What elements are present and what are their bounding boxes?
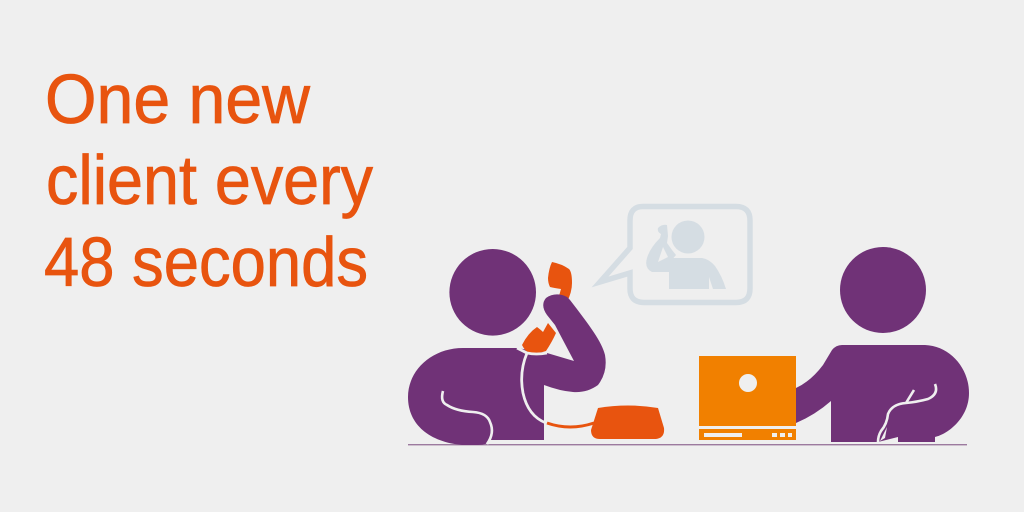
- phone cord on body: [517, 348, 547, 423]
- handset earpiece: [548, 262, 572, 302]
- title: One new: [45, 60, 310, 138]
- person: right typist: [796, 247, 969, 442]
- baseline: [408, 444, 967, 445]
- title: [44, 60, 373, 301]
- head: [449, 249, 536, 336]
- hand outline: [878, 384, 936, 442]
- bubble icon: caller: [646, 220, 726, 289]
- arm outline: [442, 391, 492, 444]
- play dot: [739, 374, 757, 392]
- laptop screen: [699, 356, 796, 426]
- body and arm: [796, 345, 969, 442]
- handset mouthpiece: [522, 323, 556, 353]
- laptop: [699, 356, 796, 440]
- body and arm: [408, 294, 606, 445]
- telephone base: [591, 406, 664, 439]
- title: 48 seconds: [44, 223, 368, 301]
- title: client every: [46, 141, 373, 219]
- pen tip: [880, 427, 887, 441]
- base details: [704, 433, 792, 437]
- laptop base: [699, 429, 796, 440]
- person: left caller: [408, 249, 664, 445]
- cord: [547, 423, 594, 427]
- speech bubble: [600, 206, 750, 302]
- head: [840, 247, 926, 333]
